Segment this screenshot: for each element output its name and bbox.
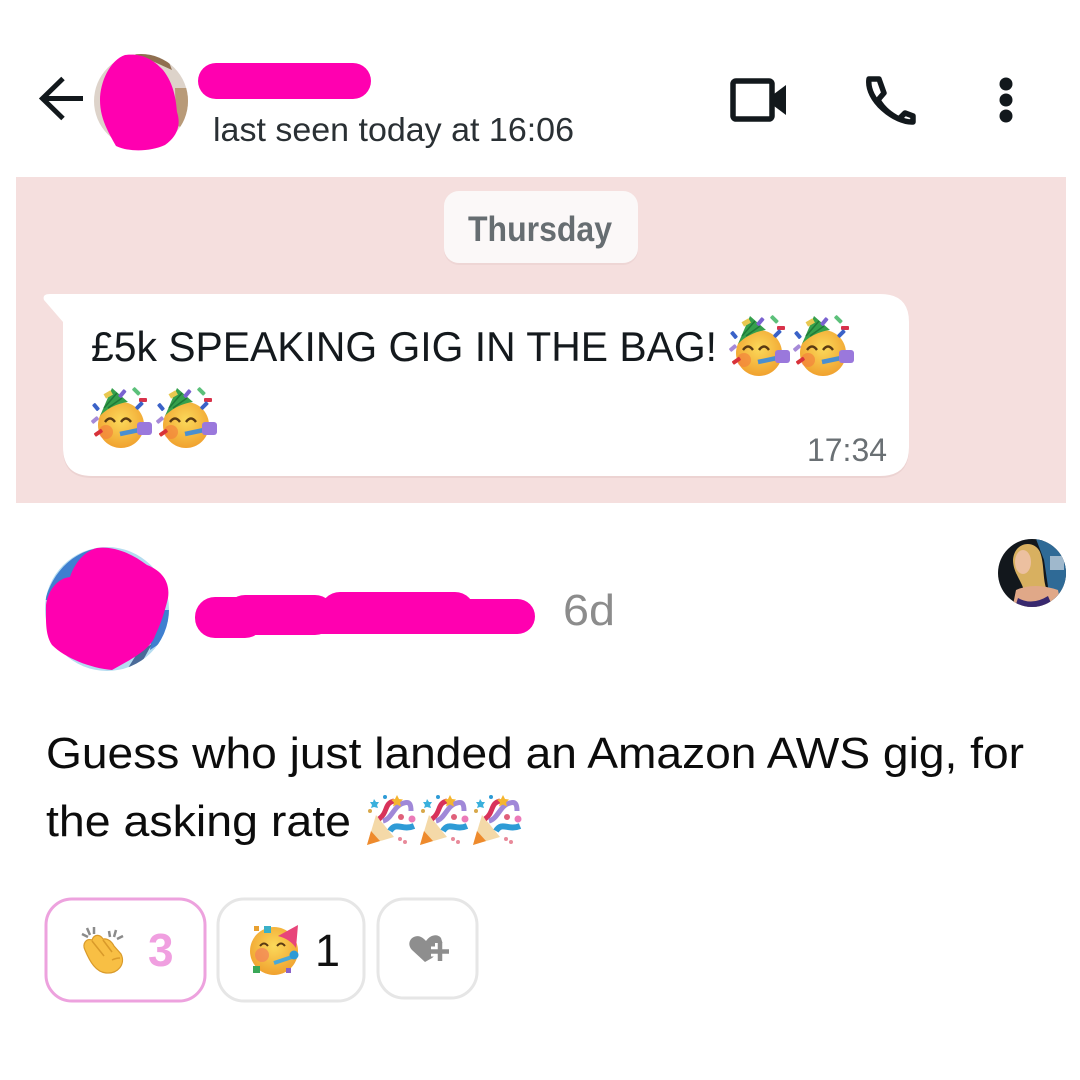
post age: 6d bbox=[563, 586, 615, 635]
panel: pink chat background bbox=[16, 177, 1066, 503]
reaction: clapping hands 3: 3 bbox=[148, 924, 174, 976]
icon: party face emoji row one bbox=[729, 315, 854, 376]
message time: 17:34 bbox=[807, 432, 887, 468]
icon: partying face bbox=[250, 925, 298, 975]
poster avatar with pink redaction bbox=[45, 547, 172, 671]
last seen status: last seen today at 16:06 bbox=[213, 111, 574, 148]
icon: clapping hands bbox=[82, 927, 123, 973]
post text: the asking rate bbox=[46, 797, 351, 846]
contact avatar with pink redaction bbox=[94, 52, 190, 150]
icon: phone bbox=[869, 79, 913, 122]
message bubble bbox=[44, 294, 909, 478]
icon: heart plus bbox=[409, 935, 449, 962]
reaction: add reaction button bbox=[378, 899, 477, 998]
reaction: clapping hands 3 bbox=[46, 899, 205, 1001]
reaction: party face 1 bbox=[218, 899, 364, 1001]
date chip bbox=[444, 191, 638, 265]
icon: party popper emojis bbox=[367, 795, 522, 845]
message text: £5k SPEAKING GIG IN THE BAG! bbox=[91, 323, 717, 370]
panel: social post bbox=[45, 539, 1070, 1001]
header: chat contact bar bbox=[42, 52, 1012, 150]
icon: overflow menu bbox=[1000, 78, 1012, 122]
post text: Guess who just landed an Amazon AWS gig, for bbox=[46, 729, 1024, 778]
post text bbox=[46, 729, 1024, 846]
reaction: party face 1: 1 bbox=[315, 925, 340, 976]
icon: video call bbox=[733, 81, 786, 119]
icon: back arrow bbox=[42, 78, 83, 118]
contact name redaction bbox=[198, 63, 371, 99]
icon: party face emoji row two bbox=[91, 387, 217, 448]
date chip: Thursday bbox=[468, 210, 612, 249]
poster name redaction bbox=[195, 592, 535, 638]
viewer avatar bbox=[998, 539, 1070, 610]
